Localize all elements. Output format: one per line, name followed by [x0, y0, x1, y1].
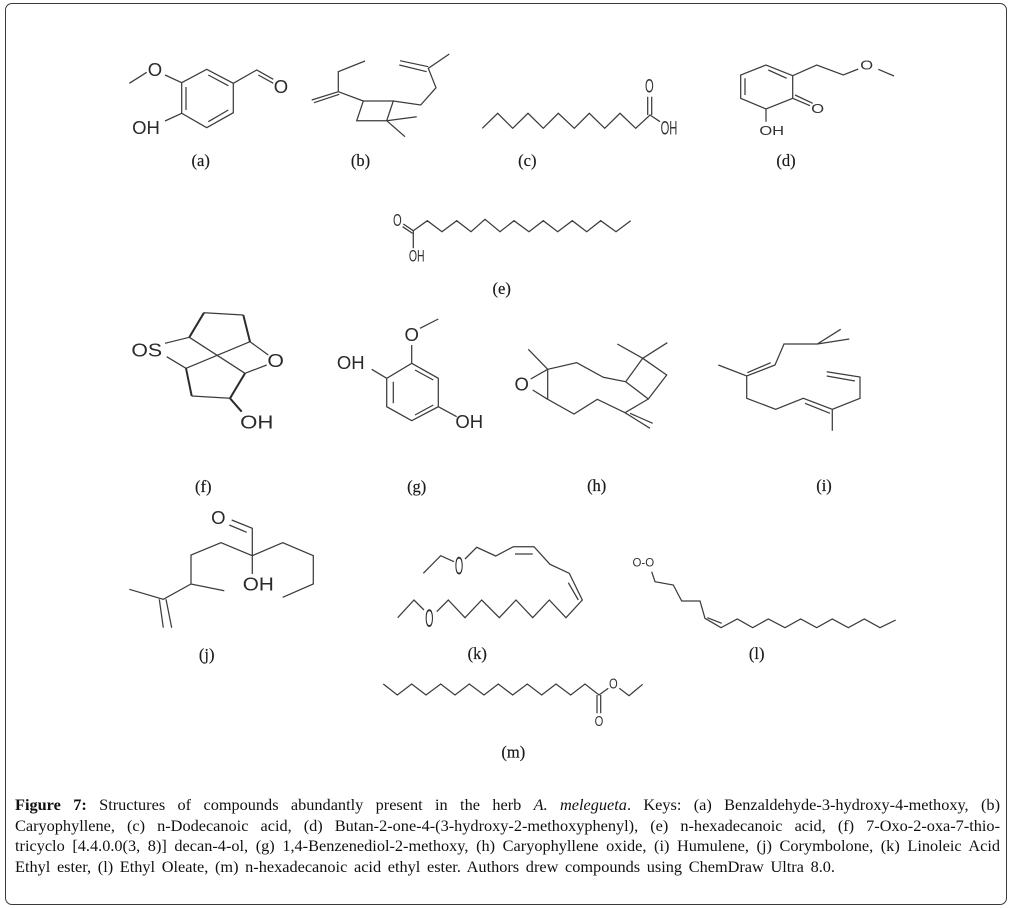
structure c: n-dodecanoic acid: OH	[661, 119, 677, 140]
structure i: humulene	[718, 329, 860, 495]
text: tricyclo [4.4.0.0(3, 8)] decan-4-ol, (g) 1,4-Benzenediol-2-methoxy, (h) Caryophyllene oxide, (i) Humulene, (j) Corymbolone, (k) Linoleic Acid	[15, 836, 1000, 855]
structure f: 7-oxo-2-oxa-7-thio-tricyclo decan-4-ol: (f)	[195, 477, 212, 496]
structure d: butan-2-one-4-(3-hydroxy-2-methoxyphenyl)	[741, 59, 894, 170]
structure l: ethyl oleate: (l)	[749, 644, 764, 663]
text: Caryophyllene, (c) n-Dodecanoic acid, (d) Butan-2-one-4-(3-hydroxy-2-methoxyphenyl), (e) n-hexadecanoic acid, (f) 7-Oxo-2-oxa-7-thio-	[15, 816, 1000, 835]
structure a: benzaldehyde-3-hydroxy-4-methoxy: (a)	[192, 151, 210, 170]
structure f: 7-oxo-2-oxa-7-thio-tricyclo decan-4-ol	[131, 313, 284, 496]
structure j: corymbolone: OH	[243, 574, 274, 595]
structure d: butan-2-one-4-(3-hydroxy-2-methoxyphenyl): O	[860, 59, 873, 73]
structure d: butan-2-one-4-(3-hydroxy-2-methoxyphenyl): O	[811, 102, 824, 116]
structure c: n-dodecanoic acid	[482, 77, 677, 170]
structure m: n-hexadecanoic acid ethyl ester	[383, 675, 643, 762]
structure m: n-hexadecanoic acid ethyl ester: O	[595, 712, 603, 729]
structure k: linoleic acid ethyl ester: O	[455, 554, 463, 581]
structure l: ethyl oleate: O-O	[632, 556, 654, 569]
structure b: caryophyllene: (b)	[351, 151, 370, 170]
structure e: n-hexadecanoic acid	[393, 212, 631, 298]
structure c: n-dodecanoic acid: (c)	[518, 151, 536, 170]
structure d: butan-2-one-4-(3-hydroxy-2-methoxyphenyl): OH	[759, 125, 784, 139]
structure d: butan-2-one-4-(3-hydroxy-2-methoxyphenyl): (d)	[776, 151, 796, 170]
structure f: 7-oxo-2-oxa-7-thio-tricyclo decan-4-ol: OH	[240, 413, 273, 433]
structure h: caryophyllene oxide: (h)	[587, 476, 606, 495]
structure g: 1,4-benzenediol-2-methoxy: (g)	[407, 477, 426, 496]
structure g: 1,4-benzenediol-2-methoxy: O	[405, 324, 419, 345]
structure j: corymbolone	[129, 507, 313, 664]
structure f: 7-oxo-2-oxa-7-thio-tricyclo decan-4-ol: O	[267, 351, 284, 372]
structure k: linoleic acid ethyl ester: (k)	[468, 644, 487, 663]
structure m: n-hexadecanoic acid ethyl ester: (m)	[501, 742, 525, 762]
text: Ethyl ester, (l) Ethyl Oleate, (m) n-hexadecanoic acid ethyl ester. Authors drew compounds using ChemDraw Ultra 8.0.	[15, 857, 835, 876]
structure f: 7-oxo-2-oxa-7-thio-tricyclo decan-4-ol: OS	[131, 341, 162, 361]
text: Figure 7: Structures of compounds abundantly present in the herb A. melegueta. Keys: (a) Benzaldehyde-3-hydroxy-4-methoxy, (b)	[15, 795, 1000, 814]
structure c: n-dodecanoic acid: O	[645, 77, 654, 98]
structure h: caryophyllene oxide: O	[515, 374, 529, 394]
structure g: 1,4-benzenediol-2-methoxy	[337, 319, 483, 496]
structure a: benzaldehyde-3-hydroxy-4-methoxy	[129, 59, 288, 170]
structure a: benzaldehyde-3-hydroxy-4-methoxy: OH	[132, 117, 160, 138]
structure j: corymbolone: (j)	[199, 645, 214, 664]
structure a: benzaldehyde-3-hydroxy-4-methoxy: O	[148, 59, 162, 80]
structure h: caryophyllene oxide	[515, 343, 667, 495]
structure k: linoleic acid ethyl ester	[398, 547, 582, 663]
structure e: n-hexadecanoic acid: OH	[409, 246, 425, 265]
structure g: 1,4-benzenediol-2-methoxy: OH	[337, 352, 365, 373]
structure j: corymbolone: O	[211, 507, 225, 528]
structure e: n-hexadecanoic acid: (e)	[493, 279, 511, 298]
structure b: caryophyllene	[312, 54, 449, 170]
structure e: n-hexadecanoic acid: O	[393, 212, 402, 231]
structure i: humulene: (i)	[816, 476, 832, 495]
structure m: n-hexadecanoic acid ethyl ester: O	[609, 675, 618, 692]
caption	[15, 795, 1000, 876]
structure a: benzaldehyde-3-hydroxy-4-methoxy: O	[274, 76, 288, 97]
structure l: ethyl oleate	[632, 556, 896, 663]
structure k: linoleic acid ethyl ester: O	[425, 606, 433, 633]
structure g: 1,4-benzenediol-2-methoxy: OH	[455, 411, 483, 432]
